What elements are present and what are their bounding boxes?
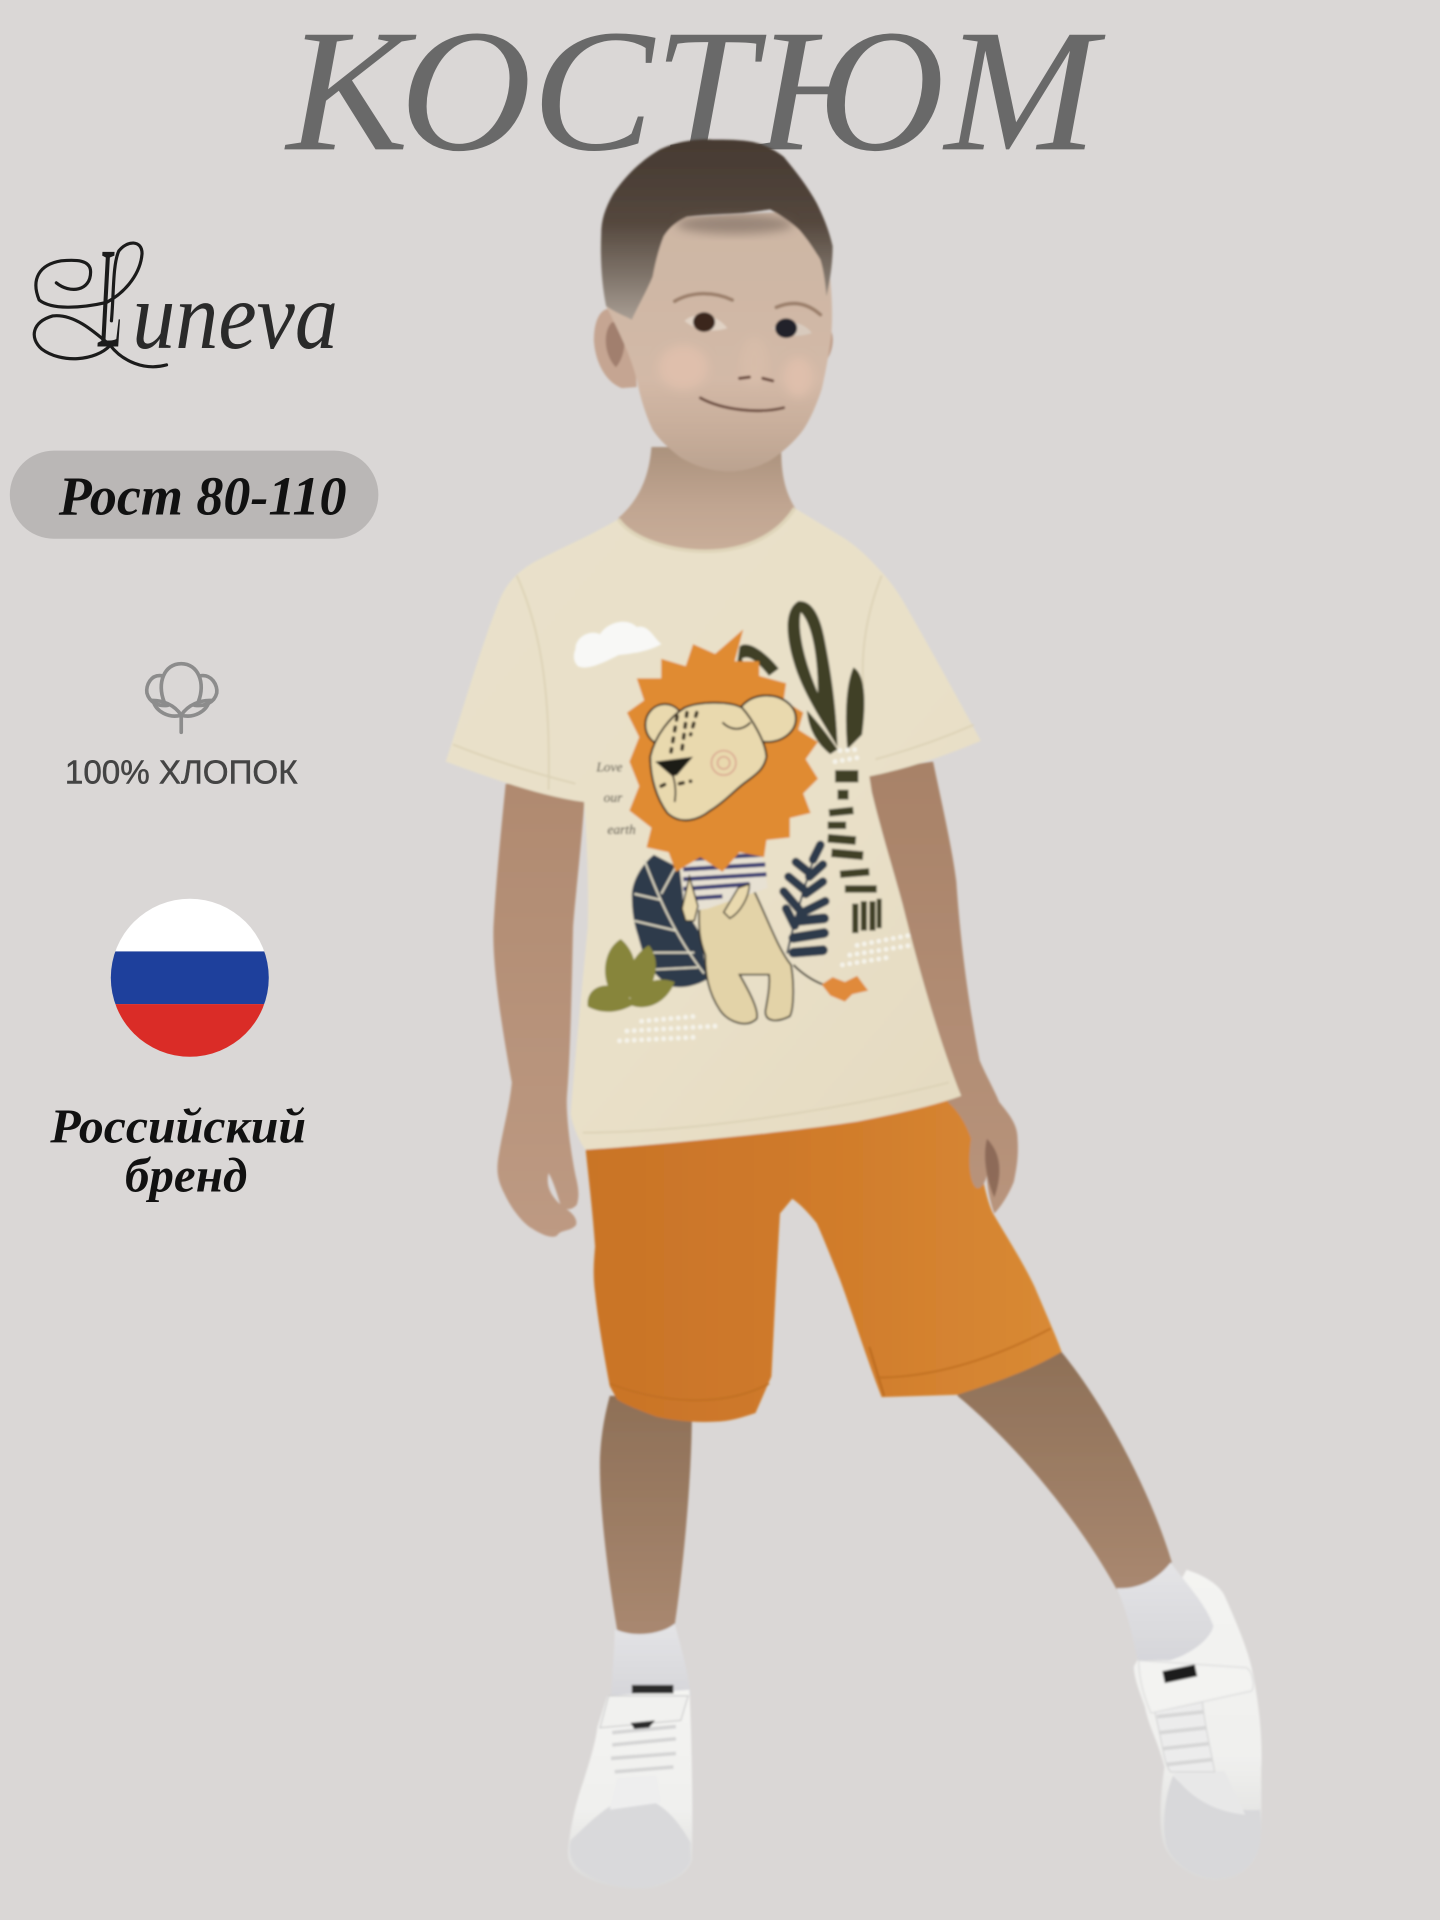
tee print: white dots [620,749,911,1041]
brand origin text: Российский [49,1098,306,1153]
cotton label: 100% ХЛОПОК [65,755,298,792]
tee print: olive bush [588,939,675,1012]
hand fold shading [985,1139,999,1198]
icon: cotton [147,664,217,732]
lion ears [645,704,684,746]
cheek glow [659,345,813,397]
icon: Russian flag [110,898,269,1057]
tee print: striped trunk [827,770,882,933]
neck [618,447,796,563]
lion nose [655,757,693,776]
tee print: lion [627,629,868,1024]
lion face [650,703,767,820]
brand origin text [49,1098,306,1202]
lion tail [793,965,823,984]
boy figure [446,139,1262,1889]
lion striped shirt [682,839,768,912]
tee print: cloud [574,622,661,667]
tee print: slogan [595,759,636,837]
mouth [700,398,784,411]
eyes [684,312,812,338]
right arm and hand [862,762,1018,1213]
nose [740,337,773,386]
height badge: Рост 80-110 [58,465,347,526]
brand logo: Luneva: L [97,219,122,379]
left shoe [568,1685,692,1889]
right sock [1117,1562,1213,1660]
lion forehead marks [661,713,697,786]
lion closed eye [722,722,751,729]
left leg [600,1396,692,1634]
hair [601,139,833,320]
brand logo: Luneva: uneva [132,263,338,369]
tee print: slogan: our [604,790,623,805]
face [606,211,832,471]
tee print: dark plant [737,601,882,933]
left arm and hand [493,784,585,1237]
lion body [699,884,793,1024]
brand logo: Luneva [34,219,338,379]
eyebrows [675,294,820,315]
right ear [818,327,833,366]
height badge [10,451,378,539]
tee print: slogan: Love [595,759,623,774]
t-shirt [446,508,981,1150]
brand origin text: бренд [125,1147,247,1202]
lion mane [627,629,818,872]
lion paw [724,884,749,918]
left ear [594,309,637,388]
shorts [585,1093,1062,1422]
right shoe [1134,1570,1262,1880]
right leg [958,1351,1172,1589]
tee print: slogan: earth [607,822,636,837]
fringe strands [676,214,793,234]
left sock [611,1624,691,1696]
tee print: fern leaf [784,845,825,953]
lion cheek [711,751,736,775]
cotton badge [65,664,298,792]
tee print: monstera leaf [632,855,707,987]
